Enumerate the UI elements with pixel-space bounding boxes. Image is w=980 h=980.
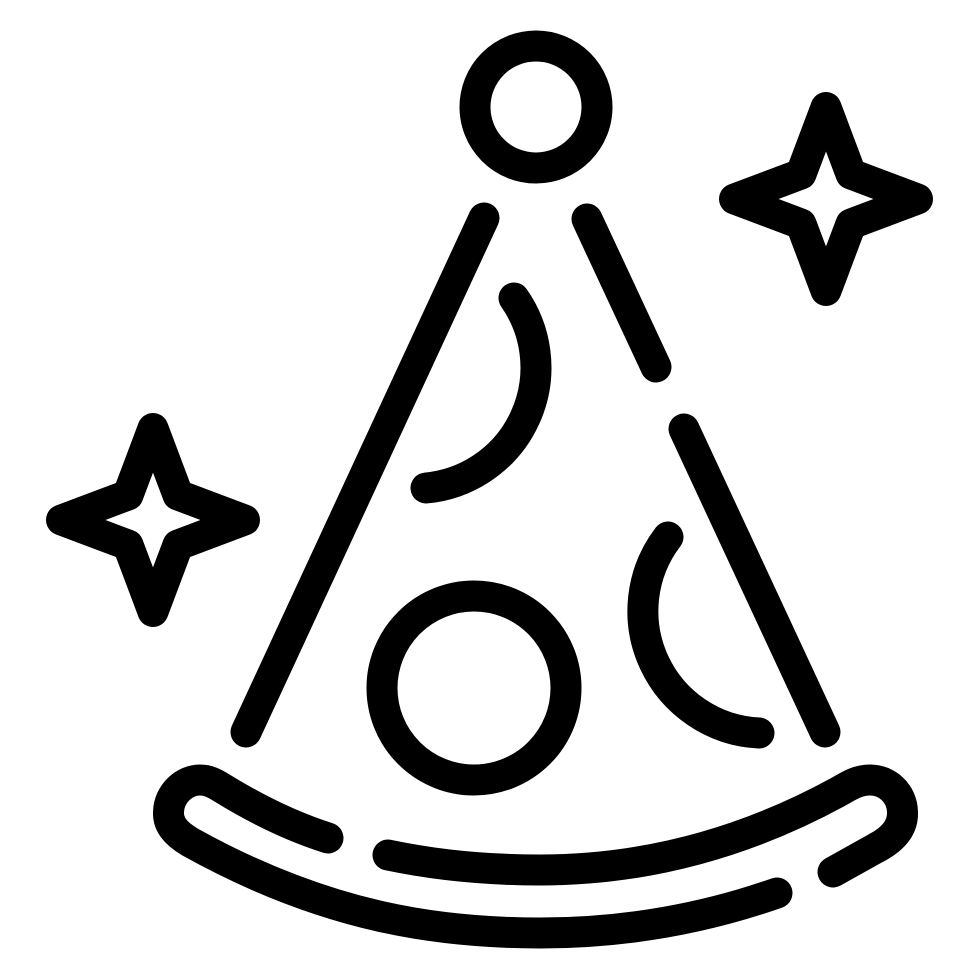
icon: right pepperoni arc [643,537,759,733]
icon: crust inner [388,780,903,872]
icon: right star [734,108,918,290]
icon: upper pepperoni arc [426,298,536,488]
icon: crust outer [168,780,777,933]
icon: pizza left edge [246,218,484,732]
icon: central pepperoni [382,596,566,780]
icon: pizza right edge lower [684,429,825,732]
icon: pizza right edge upper [587,219,656,367]
icon: left star [62,428,244,612]
icon: top circle [475,46,597,168]
